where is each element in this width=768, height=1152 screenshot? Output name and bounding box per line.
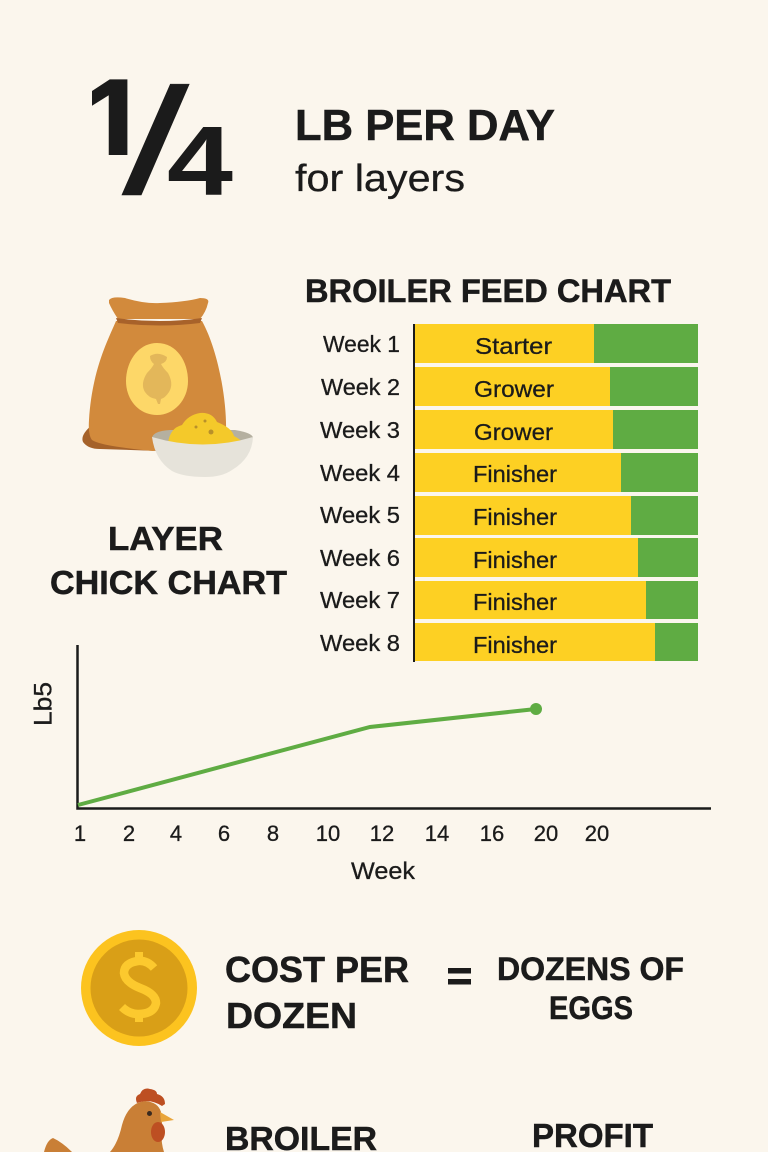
text: cost per dozen: COST PER (225, 949, 409, 990)
icon: hen (44, 1089, 174, 1152)
bar: week 8: Week 8 (320, 630, 400, 656)
x axis ticks: 12 (370, 821, 394, 846)
bar: week 7: Week 7 (320, 587, 400, 613)
heading: layer chick chart: LAYER (108, 520, 223, 557)
bar: week 5 (320, 496, 698, 535)
x axis ticks: 6 (218, 821, 230, 846)
bar: week 8 (320, 623, 698, 661)
bar: week 3 (320, 410, 698, 449)
heading: layer chick chart: CHICK CHART (50, 564, 287, 601)
chart: layer weight line (30, 645, 711, 885)
headline: LB per day for layers: for layers (295, 158, 465, 200)
chart: broiler feed stacked bars (320, 324, 698, 662)
x axis ticks: 16 (480, 821, 504, 846)
headline: LB per day for layers: LB PER DAY (295, 101, 555, 150)
x axis ticks: 1 (74, 821, 86, 846)
headline: LB per day for layers (295, 101, 555, 200)
bar: week 6: Finisher (473, 547, 557, 573)
headline fraction: 1/4 (92, 79, 232, 196)
bar: week 5: Finisher (473, 504, 557, 530)
equals sign (448, 968, 471, 984)
bar: week 5: Week 5 (320, 502, 400, 528)
text: dozens of eggs (497, 951, 684, 1026)
x axis ticks: 8 (267, 821, 279, 846)
bar: week 6: Week 6 (320, 545, 400, 571)
bar: week 1: Starter (475, 333, 552, 359)
headline fraction: 1/4: / (122, 57, 189, 226)
x axis ticks: 20 (585, 821, 609, 846)
text: dozens of eggs: EGGS (549, 990, 633, 1026)
bar: week 2 (321, 367, 698, 406)
x axis ticks: 4 (170, 821, 182, 846)
bar: week 4: Week 4 (320, 460, 400, 486)
headline fraction: 1/4: 1 (77, 50, 153, 202)
y axis label: Lb5 (30, 682, 58, 726)
x axis ticks: 2 (123, 821, 135, 846)
bar: week 3: Week 3 (320, 417, 400, 443)
x axis ticks (74, 821, 609, 846)
bar: week 1: Week 1 (323, 331, 400, 357)
bar: week 7: Finisher (473, 589, 557, 615)
bar: week 1 (323, 324, 698, 363)
bar: week 3: Grower (474, 419, 553, 445)
x axis label: Week (351, 858, 416, 885)
bar: week 2: Grower (474, 376, 554, 402)
headline fraction: 1/4: 4 (167, 106, 233, 216)
x axis ticks: 10 (316, 821, 340, 846)
bar: week 4 (320, 453, 698, 492)
icon: feed sack with bowl (82, 297, 253, 477)
bar: week 6 (320, 538, 698, 577)
bar: week 8: Finisher (473, 632, 557, 658)
heading: layer chick chart (50, 520, 287, 601)
text: cost per dozen (225, 949, 409, 1036)
bar: week 2: Week 2 (321, 374, 400, 400)
text: cost per dozen: DOZEN (226, 995, 357, 1036)
text: dozens of eggs: DOZENS OF (497, 951, 684, 987)
icon: dollar coin (81, 930, 197, 1046)
x axis ticks: 20 (534, 821, 558, 846)
bar: week 7 (320, 581, 698, 619)
bar: week 4: Finisher (473, 461, 557, 487)
heading: broiler feed chart: BROILER FEED CHART (305, 273, 671, 309)
x axis ticks: 14 (425, 821, 449, 846)
